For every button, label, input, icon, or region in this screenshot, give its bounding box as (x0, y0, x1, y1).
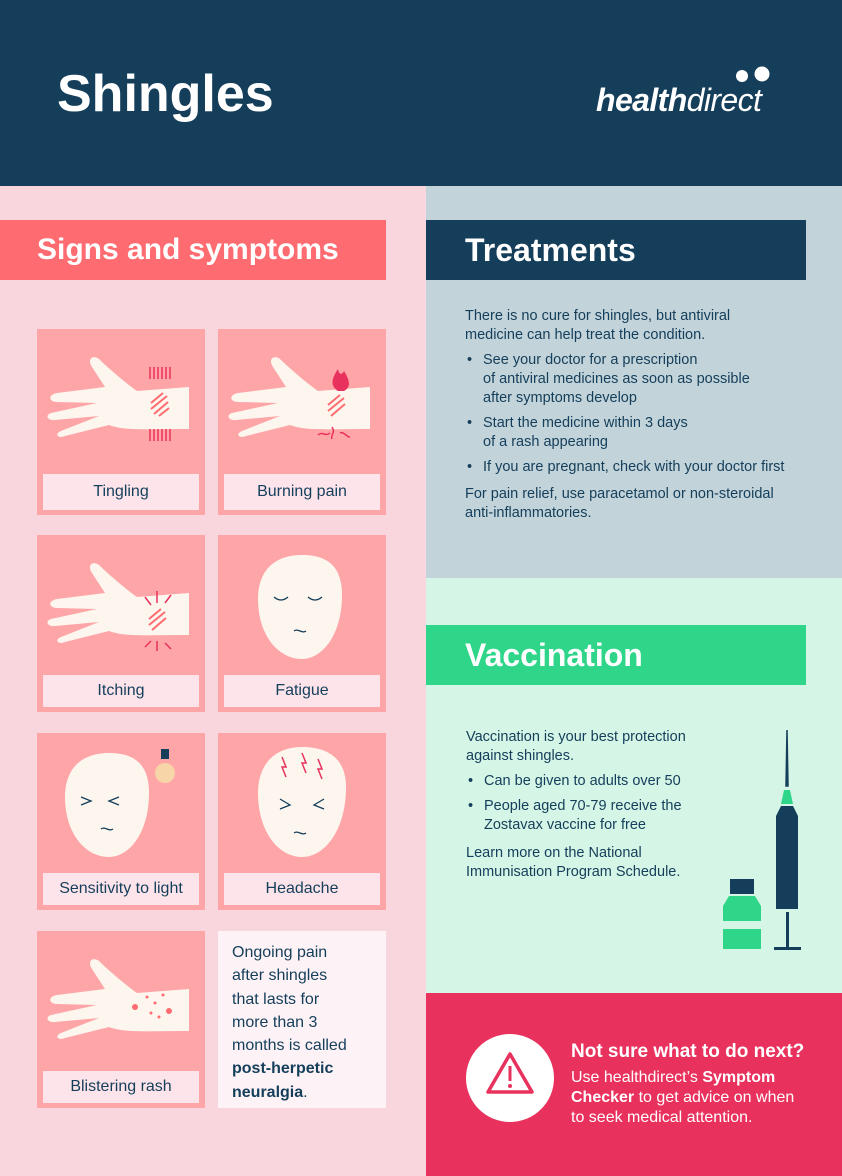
text block: post-herpetic neuralgia: after shingles (232, 967, 327, 984)
label: burning pain (224, 474, 380, 510)
card: headache (218, 733, 386, 910)
label: tingling (43, 474, 199, 510)
text: vaccination: Learn more on the National Immunisation Program Schedule. (466, 845, 680, 880)
text: treatments: of antiviral medicines as soon as possible (483, 371, 750, 387)
panel: not sure what to do next (426, 993, 842, 1176)
text: treatments: If you are pregnant, check with your doctor first (483, 459, 784, 475)
text: treatments (465, 308, 784, 521)
text: treatments: Start the medicine within 3 days (483, 415, 688, 431)
text: vaccination (466, 729, 686, 880)
text: treatments: There is no cure for shingles, but antiviral medicine can help treat the condition. (465, 308, 730, 343)
callout text: Not sure what to do next? (571, 1041, 804, 1062)
label: fatigue: Fatigue (275, 682, 329, 699)
label: sensitivity to light: Sensitivity to light (59, 880, 183, 897)
icon: warning (466, 1034, 554, 1122)
card: tingling (37, 329, 205, 515)
label: blistering rash (43, 1071, 199, 1103)
panel: signs and symptoms (0, 186, 426, 1176)
card: blistering rash (37, 931, 205, 1108)
label: itching (43, 675, 199, 707)
label: headache (224, 873, 380, 905)
panel: vaccination (426, 578, 842, 993)
callout text: Use healthdirect’s Symptom Checker to get advice on when to seek medical attention. (571, 1069, 794, 1126)
text: treatments: For pain relief, use paracetamol or non-steroidal anti-inflammatories. (465, 486, 774, 521)
label: burning pain: Burning pain (257, 483, 347, 500)
text: vaccination: Vaccination is your best protection against shingles. (466, 729, 686, 764)
label: blistering rash: Blistering rash (70, 1078, 172, 1095)
label: itching: Itching (97, 682, 145, 699)
label: headache: Headache (266, 880, 338, 897)
text block: post-herpetic neuralgia: more than 3 (232, 1014, 317, 1031)
heading: vaccination (426, 625, 806, 685)
title: Shingles (57, 65, 274, 123)
text block: post-herpetic neuralgia: months is called (232, 1037, 347, 1054)
logo (596, 66, 770, 118)
heading: treatments (426, 220, 806, 280)
card: sensitivity to light (37, 733, 205, 910)
label: fatigue (224, 675, 380, 707)
text block: post-herpetic neuralgia: Ongoing pain (232, 944, 327, 961)
text block: post-herpetic neuralgia: that lasts for (232, 991, 319, 1008)
label: tingling: Tingling (93, 483, 149, 500)
card: fatigue (218, 535, 386, 712)
logo: healthdirect (596, 82, 761, 118)
heading: treatments: Treatments (465, 232, 636, 268)
text: treatments: of a rash appearing (483, 434, 608, 450)
text block: post-herpetic neuralgia: post-herpetic (232, 1060, 333, 1077)
heading: vaccination: Vaccination (465, 636, 643, 672)
text: treatments: after symptoms develop (483, 390, 637, 406)
text block: post-herpetic neuralgia: neuralgia. (232, 1084, 308, 1101)
callout text (571, 1041, 804, 1126)
text: treatments: See your doctor for a prescription (483, 352, 697, 368)
card: itching (37, 535, 205, 712)
heading: signs and symptoms: Signs and symptoms (37, 233, 339, 266)
card: burning pain (218, 329, 386, 515)
icon: syringe and vial (723, 730, 801, 950)
text block: post-herpetic neuralgia (218, 931, 386, 1108)
heading: signs and symptoms (0, 220, 386, 280)
label: sensitivity to light (43, 873, 199, 905)
text: vaccination: Can be given to adults over 50 (484, 773, 681, 789)
text: vaccination: People aged 70-79 receive the Zostavax vaccine for free (484, 798, 682, 833)
header (0, 0, 842, 186)
panel: treatments (426, 186, 842, 578)
